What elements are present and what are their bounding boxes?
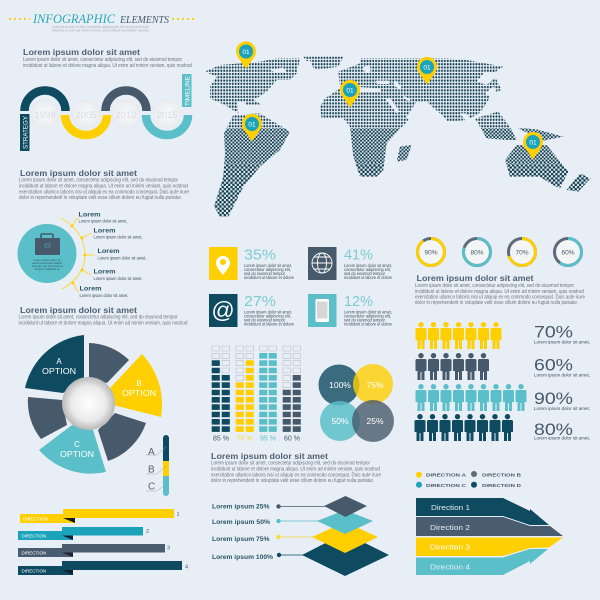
stat: 41%: 41% [344, 246, 373, 264]
heading and text: layers: exercitation ullamco laboris nisi ut aliquip ex ea commodo consequat. Duis aute irure [211, 472, 381, 478]
timeline chart [20, 74, 192, 151]
stacked layers chart: Lorem ipsum 25% [212, 504, 270, 510]
pie option chart: A [56, 357, 62, 366]
teal circle with briefcase icon: tempor incididunt ut [35, 267, 59, 271]
stat: 27%: @ [211, 297, 235, 323]
people percentages: Lorem ipsum dolor sit amet, [534, 406, 590, 411]
teal circle with briefcase icon: Lorem ipsum dolor sit [34, 258, 61, 262]
timeline chart: 1999 [34, 110, 56, 121]
people chart row 60% [416, 353, 489, 380]
stacked layers chart: Lorem ipsum 75% [212, 536, 270, 543]
direction legend: DIRECTION D [482, 483, 522, 489]
stat: 35%: 35% [244, 246, 276, 264]
bar 2 [18, 527, 149, 540]
ring 90% [418, 238, 444, 266]
yellow cells [236, 361, 254, 432]
heading and text: timeline [23, 47, 192, 69]
stat: 12%: Lorem ipsum dolor sit amet, [344, 310, 392, 314]
pie option chart: C [74, 440, 80, 449]
title: Lorem ipsum dolor sit amet, consectetur adipiscing elit, sed do eiusmod tempor [52, 25, 150, 29]
stat: 41%: sed do eiusmod tempor [344, 271, 385, 276]
heading and text: layers [211, 451, 381, 484]
direction legend: DIRECTION A [426, 472, 467, 478]
ring 60% [554, 238, 582, 266]
stat: 35%: sed do eiusmod tempor [244, 271, 285, 276]
heading and text: rings: incididunt ut labore et dolore magna aliqua. Ut enim ad minim veniam, quis nostrud [415, 289, 584, 295]
heading and text: layers: dolor in reprehenderit in voluptate velit esse cillum dolore eu fugiat nulla pariatur. [211, 478, 374, 484]
yellow branch curve [61, 217, 95, 292]
branch labels: Lorem ipsum dolor sit amet, [94, 234, 142, 240]
timeline chart: 2005 [75, 110, 97, 121]
teal cells [260, 353, 276, 432]
bar 2: 2 [146, 529, 149, 535]
arrow 4 [416, 549, 548, 575]
arrow 4: Direction 4 [430, 564, 470, 572]
bar 1 [20, 509, 180, 523]
branch labels: Lorem [94, 228, 116, 234]
stat: 12% [308, 293, 392, 327]
bar 3: DIRECTION [22, 550, 46, 556]
A B C legend: C [148, 482, 155, 492]
title [9, 11, 194, 32]
branch labels: Lorem ipsum dolor sit amet, [94, 276, 142, 281]
bar labels: 75 % [237, 436, 252, 442]
slate cells [283, 375, 300, 432]
stat: 12%: incididunt ut labore et dolore [344, 321, 392, 326]
title: ELEMENTS [119, 15, 169, 26]
bar 4 [18, 561, 188, 575]
heading and text: second block: exercitation ullamco laboris nisi ut aliquip ex ea commodo consequat. Duis aute irure [19, 189, 189, 195]
heading and text: timeline: Lorem ipsum dolor sit amet [23, 47, 140, 57]
heading and text: third block: Lorem ipsum dolor sit amet, consectetur adipiscing elit, sed do eiusmod tempor [18, 314, 178, 320]
ring 80%: 80% [470, 250, 484, 256]
people percentages: 80% [534, 420, 573, 439]
branch labels: Lorem [94, 268, 116, 276]
stat: 27% [209, 293, 294, 327]
bar labels [213, 436, 300, 442]
venn diagram: 100% [329, 380, 351, 390]
title: INFOGRAPHIC [32, 11, 115, 26]
bar 1: 1 [176, 512, 180, 518]
direction legend: DIRECTION C [426, 483, 467, 489]
arrow 1 [416, 498, 549, 525]
bar 3: 3 [167, 546, 170, 552]
people percentages: Lorem ipsum dolor sit amet, [534, 340, 590, 344]
heading and text: timeline: Lorem ipsum dolor sit amet, consectetur adipiscing elit, sed do eiusmod tempor [23, 57, 182, 63]
empty cells [212, 346, 300, 388]
people percentages [534, 322, 590, 440]
pie option chart: OPTION [122, 389, 156, 398]
timeline chart: 2010 [115, 110, 137, 121]
heading and text: second block: dolor in reprehenderit in voluptate velit esse cillum dolore eu fugiat nulla pariatur. [19, 195, 182, 201]
direction bars [18, 509, 188, 575]
timeline chart: 2015 [156, 110, 178, 121]
pie option chart: OPTION [60, 450, 94, 459]
heading and text: timeline: incididunt ut labore et dolore magna aliqua. Ut enim ad minim veniam, quis nostrud [23, 63, 192, 69]
stat: 27%: sed do eiusmod tempor [244, 317, 285, 322]
heading and text: third block [18, 305, 188, 326]
A B C legend: B [148, 464, 155, 476]
heading and text: second block: incididunt ut labore et dolore magna aliqua. Ut enim ad minim veniam, quis nostrud [19, 184, 188, 190]
arrow 2 [416, 517, 563, 536]
stacked layers chart [212, 496, 389, 576]
heading and text: second block [19, 168, 189, 201]
arrow 3 [416, 538, 563, 556]
stat: 41%: consectetur adipiscing elit, [344, 267, 391, 272]
bar 4: 4 [185, 564, 188, 570]
teal circle with briefcase icon: cing elit, sed do eiusmod [32, 264, 63, 268]
bar labels: 95 % [260, 436, 276, 442]
bar 3 [18, 544, 170, 557]
stat: 41% [308, 246, 392, 280]
heading and text: third block: Lorem ipsum dolor sit amet [20, 305, 137, 315]
stat: 35%: Lorem ipsum dolor sit amet, [244, 263, 292, 268]
direction legend [416, 471, 522, 489]
progress rings [418, 238, 582, 266]
pie option chart: OPTION [42, 367, 76, 376]
teal circle with briefcase icon: amet consectetur adipis [32, 261, 62, 265]
branch labels: Lorem ipsum dolor sit amet, [98, 256, 146, 260]
briefcase diagram [18, 212, 146, 298]
bar labels: 60 % [284, 436, 300, 442]
map pins [236, 41, 543, 159]
venn diagram: 50% [331, 416, 349, 426]
block bar chart [212, 346, 300, 442]
bar 4: DIRECTION [22, 568, 46, 574]
heading and text: second block: Lorem ipsum dolor sit amet [20, 168, 137, 178]
A B C legend: A [148, 447, 155, 458]
stat: 35%: consectetur adipiscing elit, [244, 267, 291, 272]
heading and text: third block: incididunt ut labore et dolore magna aliqua. Ut enim ad minim veniam, quis nostrud [18, 320, 188, 326]
people percentages: 70% [534, 322, 573, 342]
heading and text: rings: Lorem ipsum dolor sit amet [416, 273, 534, 283]
people percentages: 90% [534, 389, 573, 408]
bar 2: DIRECTION [22, 534, 46, 538]
pie option chart: B [136, 379, 142, 388]
branch labels: Lorem ipsum dolor sit amet, [78, 218, 128, 224]
people percentages: Lorem ipsum dolor sit amet, [534, 436, 590, 440]
teal circle with briefcase icon [18, 224, 76, 283]
ring 60%: 60% [561, 250, 575, 256]
stat: 12%: 12% [344, 293, 373, 310]
branch labels: Lorem [78, 212, 101, 218]
stacked layers chart: Lorem ipsum 50% [212, 519, 270, 526]
stat: 27%: incididunt ut labore et dolore [244, 321, 294, 326]
people chart row 90% [416, 384, 526, 411]
people percentages: 60% [534, 356, 573, 374]
ring 80% [464, 238, 490, 266]
direction legend: DIRECTION B [482, 472, 522, 478]
navy cells [212, 361, 230, 432]
bar labels: 85 % [213, 436, 229, 442]
stacked layers chart: Lorem ipsum 100% [212, 554, 273, 561]
people percentages: Lorem ipsum dolor sit amet, [534, 372, 590, 378]
stat: 27%: 27% [244, 293, 276, 310]
direction arrows [416, 498, 563, 575]
stat: 12%: consectetur adipiscing elit, [344, 313, 391, 318]
heading and text: second block: Lorem ipsum dolor sit amet, consectetur adipiscing elit, sed do eiusmod tempor [19, 178, 178, 184]
ring 90%: 90% [424, 250, 438, 256]
heading and text: layers: Lorem ipsum dolor sit amet [211, 451, 328, 461]
heading and text: layers: Lorem ipsum dolor sit amet, consectetur adipiscing elit, sed do eiusmod tempor [211, 460, 370, 466]
A B C legend [146, 435, 169, 496]
heading and text: rings [415, 273, 585, 306]
stat: 35%: incididunt ut labore et dolore [244, 275, 294, 280]
stat: 41%: Lorem ipsum dolor sit amet, [344, 263, 392, 268]
venn diagram: 25% [366, 416, 384, 426]
stat: 35% [209, 246, 294, 280]
ring 70%: 70% [515, 250, 529, 256]
branch labels: Lorem [80, 286, 102, 292]
branch labels: Lorem [98, 248, 120, 255]
arrow 1: Direction 1 [431, 505, 470, 512]
heading and text: layers: incididunt ut labore et dolore magna aliqua. Ut enim ad minim veniam, quis nostrud [211, 466, 380, 472]
timeline chart: TIMELINE [186, 76, 192, 106]
stat: 41%: incididunt ut labore et dolore [344, 275, 392, 280]
pie option chart [25, 335, 162, 474]
venn diagram [318, 364, 394, 442]
bar 1: DIRECTION [23, 516, 48, 522]
people chart row 80% [414, 414, 513, 441]
stat: 27%: Lorem ipsum dolor sit amet, [244, 310, 292, 314]
arrow 2: Direction 2 [430, 525, 470, 532]
stat: 12%: sed do eiusmod tempor [344, 317, 385, 322]
branch labels [78, 212, 146, 298]
stat: 27%: consectetur adipiscing elit, [244, 313, 291, 318]
venn diagram: 75% [366, 380, 384, 390]
branch labels: Lorem ipsum dolor sit amet, [80, 293, 128, 298]
timeline chart: STRATEGY [24, 116, 30, 149]
heading and text: rings: dolor in reprehenderit in voluptate velit esse cillum dolore eu fugiat nulla pariatur. [415, 300, 578, 306]
title: ut labore et enim ad minim veniam, quis nostrud exercitation ullamco [52, 28, 149, 32]
people chart row 70% [416, 322, 502, 349]
arrow 3: Direction 3 [430, 544, 470, 552]
heading and text: rings: Lorem ipsum dolor sit amet, consectetur adipiscing elit, sed do eiusmod tempor [415, 283, 574, 289]
world map [206, 56, 590, 217]
ring 70% [508, 238, 536, 266]
